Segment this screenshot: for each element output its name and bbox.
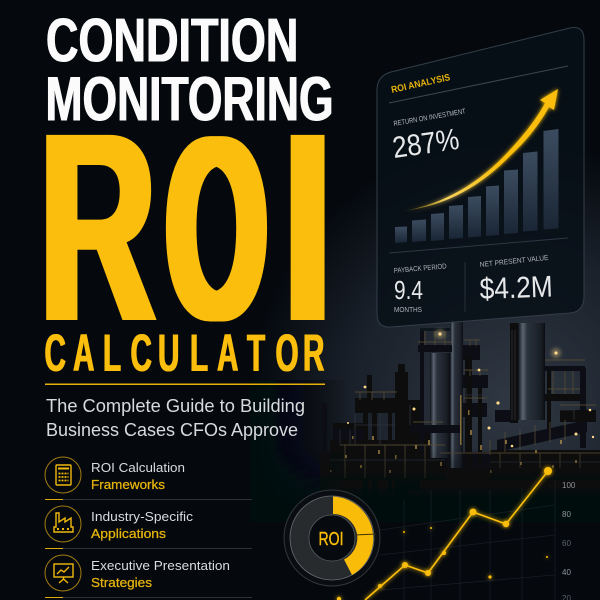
feature: executive presentation strategies	[45, 555, 252, 598]
feature: executive presentation strategies: Executive Presentation	[91, 558, 230, 573]
title: ROI: O	[167, 82, 266, 375]
title: calculator: T	[247, 324, 265, 383]
icon: factory	[45, 506, 81, 542]
fade to the dark foreground	[250, 448, 600, 522]
subtitle	[46, 395, 305, 440]
donut chart: ROI: ROI	[318, 529, 344, 549]
refinery lamps	[347, 329, 594, 447]
icon: calculator	[45, 457, 81, 493]
payback period metric: 9.4	[394, 275, 423, 305]
line chart	[337, 467, 552, 600]
title: calculator: O	[276, 324, 299, 383]
feature: ROI calculation frameworks: ROI Calculation	[91, 460, 185, 475]
feature: industry-specific applications: Applications	[91, 526, 167, 541]
title: calculator: L	[103, 324, 121, 383]
feature: ROI calculation frameworks	[45, 457, 252, 500]
title: calculator: C	[44, 324, 66, 383]
left tower cluster	[330, 364, 445, 498]
subtitle: Business Cases CFOs Approve	[46, 419, 298, 440]
central columns	[410, 320, 488, 468]
title: calculator: A	[217, 324, 238, 383]
title: calculator: R	[303, 324, 324, 383]
subtitle: The Complete Guide to Building	[46, 395, 305, 416]
title: calculator: A	[73, 324, 94, 383]
axis labels: 60	[562, 539, 571, 548]
title: calculator: U	[158, 324, 179, 383]
title: calculator: C	[130, 324, 152, 383]
title: ROI	[39, 77, 335, 378]
title: condition monitoring: CONDITION	[46, 5, 298, 75]
feature: executive presentation strategies: Strategies	[91, 575, 153, 590]
net present value metric	[479, 253, 553, 306]
right large column and frame	[490, 323, 600, 480]
growth arrow	[403, 89, 558, 211]
dim window lights	[330, 395, 577, 473]
net present value metric: $4.2M	[479, 270, 553, 306]
return on investment metric: RETURN ON INVESTMENT	[393, 106, 467, 128]
title: calculator	[44, 324, 324, 383]
bar chart	[395, 129, 558, 243]
chart grid	[380, 480, 555, 600]
title: ROI: R	[39, 77, 156, 378]
net present value metric: NET PRESENT VALUE	[479, 253, 549, 269]
panel card	[377, 28, 584, 327]
feature: industry-specific applications: Industry-Specific	[91, 509, 194, 524]
return on investment metric: 287%	[390, 123, 461, 165]
axis labels: 80	[562, 510, 571, 519]
title: condition monitoring	[46, 5, 334, 134]
title: ROI: I	[281, 77, 335, 377]
gold railings and scaffolding	[340, 331, 600, 478]
payback period metric: MONTHS	[394, 307, 422, 314]
feature: ROI calculation frameworks: Frameworks	[91, 477, 166, 492]
axis labels: 40	[562, 568, 571, 577]
title: calculator: L	[190, 324, 208, 383]
title: condition monitoring: MONITORING	[46, 63, 334, 134]
panel heading: ROI ANALYSIS	[390, 72, 451, 96]
payback period metric: PAYBACK PERIOD	[393, 261, 447, 275]
distant low structures	[320, 403, 600, 518]
axis labels	[562, 481, 576, 600]
panel: ROI analysis	[377, 28, 584, 327]
payback period metric	[393, 261, 447, 314]
donut chart: ROI	[284, 490, 380, 586]
feature: industry-specific applications	[45, 506, 252, 549]
illustration: refinery at night	[250, 320, 600, 522]
axis labels: 100	[562, 481, 576, 490]
icon: presentation board	[45, 555, 81, 591]
